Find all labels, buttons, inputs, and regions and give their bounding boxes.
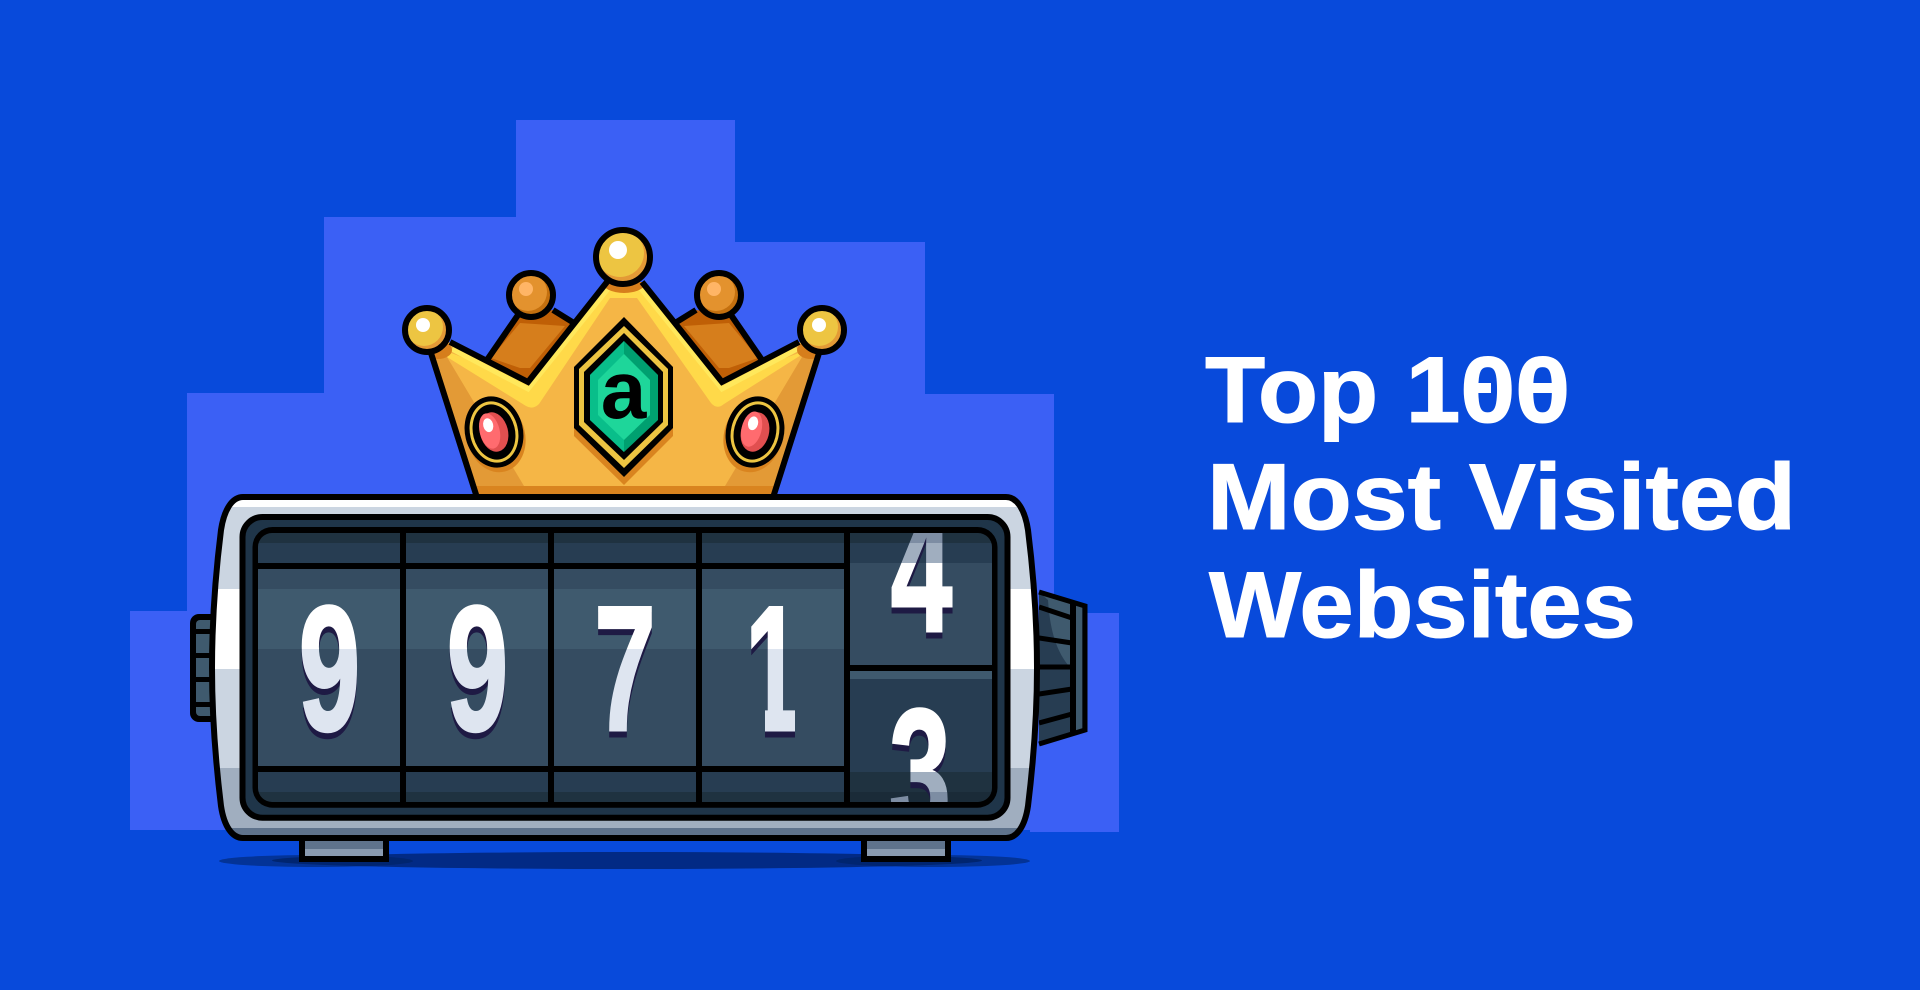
digit 3 rolling in xyxy=(890,707,948,802)
digit 3 rolling in: 3 xyxy=(889,673,951,871)
gem: left ruby xyxy=(457,390,533,479)
digit 4 rolling out: 4 xyxy=(891,477,952,675)
ground shadow xyxy=(219,852,1030,869)
crown xyxy=(405,229,844,500)
title line 2: Most Visited xyxy=(1207,444,1796,549)
digit 9: 9 xyxy=(447,570,508,768)
digit 4 rolling out: 4 xyxy=(891,471,952,669)
digit 1 xyxy=(751,606,795,738)
ball: top xyxy=(596,229,650,284)
ball: mid right xyxy=(697,273,741,317)
crown back point: left xyxy=(487,310,576,382)
digit 9: 9 xyxy=(299,576,360,774)
flip display xyxy=(252,527,998,808)
ball: mid left xyxy=(509,273,553,317)
digit 9 xyxy=(302,604,357,740)
crown back point: right xyxy=(673,310,762,382)
digit 9 xyxy=(450,604,505,740)
emblem: green hexagon with letter a: a xyxy=(601,345,648,436)
stepped bar backdrop xyxy=(130,120,1119,832)
title line 1: Top 100 xyxy=(1205,337,1570,442)
side knob: left xyxy=(190,614,220,722)
digit 9: 9 xyxy=(299,570,360,768)
title line 3: Websites xyxy=(1209,552,1636,657)
digit 7: 7 xyxy=(594,570,656,768)
title xyxy=(1205,337,1796,657)
digit 7: 7 xyxy=(594,576,656,774)
display rows xyxy=(258,533,992,802)
foot: right xyxy=(861,836,951,862)
flip clock body xyxy=(209,494,1040,841)
digit 3 rolling in: 3 xyxy=(889,679,951,877)
gem: right ruby xyxy=(716,390,792,479)
ball: far right xyxy=(800,308,844,352)
crown main body xyxy=(428,280,822,494)
digit 9: 9 xyxy=(447,576,508,774)
side knob: right xyxy=(1039,592,1085,744)
digit 1: 1 xyxy=(745,568,801,768)
foot: left xyxy=(299,836,389,862)
digit 4 rolling out xyxy=(892,533,953,638)
ball: far left xyxy=(405,308,449,352)
clock bezel xyxy=(242,517,1008,818)
digit 7 xyxy=(598,606,652,738)
digit 1: 1 xyxy=(745,574,801,774)
emblem: green hexagon with letter a xyxy=(574,317,673,485)
